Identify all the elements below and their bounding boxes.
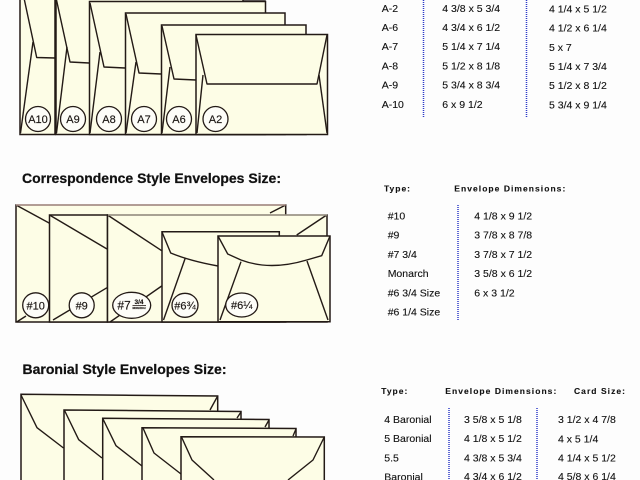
- envelope 5: [181, 437, 324, 480]
- row A-10: 5 3/4 x 9 1/4: [549, 100, 607, 112]
- row Monarch: 3 5/8 x 6 1/2: [474, 268, 532, 280]
- badge A6: A6: [172, 114, 186, 126]
- badge A10: A10: [28, 114, 48, 126]
- row #7 3/4: #7 3/4: [388, 249, 417, 261]
- envelope A6: [162, 25, 306, 134]
- envelope #10: [16, 205, 286, 322]
- envelope #9: [50, 215, 108, 322]
- heading: baronial: Baronial Style Envelopes Size:: [22, 361, 227, 377]
- faint top edges: [16, 205, 327, 215]
- row #9: 3 7/8 x 8 7/8: [474, 230, 532, 242]
- row A-8: 5 1/4 x 7 3/4: [549, 61, 607, 73]
- row #9: #9: [388, 230, 400, 242]
- table: announcement sizes: [382, 0, 607, 118]
- badge A6: [166, 106, 192, 132]
- row 4 Baronial: 4 Baronial: [384, 414, 432, 426]
- row #7 3/4: [388, 249, 532, 261]
- envelope #7 3/4: [108, 215, 327, 322]
- heading: correspondence: Correspondence Style Envelopes Size:: [22, 170, 281, 186]
- table: correspondence sizes: [384, 184, 565, 321]
- envelope #6 1/4: [218, 236, 330, 322]
- table header: Card Size:: [574, 386, 625, 396]
- row #6 1/4 Size: #6 1/4 Size: [388, 306, 440, 318]
- row A-7: 5 1/4 x 7 1/4: [442, 41, 500, 53]
- row A-7: [382, 41, 572, 54]
- badge #10: [23, 293, 49, 318]
- badge A2: A2: [209, 114, 222, 126]
- envelope 2: [64, 410, 241, 480]
- row 5.5: 4 1/4 x 5 1/2: [558, 452, 616, 464]
- badge #7 3/4: #7: [117, 298, 131, 312]
- row Monarch: Monarch: [388, 268, 429, 280]
- row A-10: 6 x 9 1/2: [442, 99, 483, 111]
- row 5.5: 5.5: [384, 452, 399, 464]
- row 5 Baronial: 5 Baronial: [384, 433, 432, 445]
- table header: [381, 386, 625, 396]
- badge #6 1/4: [226, 293, 258, 317]
- row A-2: A-2: [382, 3, 398, 15]
- row A-9: 5 3/4 x 8 3/4: [442, 80, 500, 92]
- row 5 Baronial: 4 1/8 x 5 1/2: [464, 433, 522, 445]
- row #7 3/4: 3 7/8 x 7 1/2: [474, 249, 532, 261]
- badge #6 1/4: #6¼: [231, 300, 253, 312]
- envelope 3: [103, 418, 269, 480]
- envelope A9: [56, 0, 265, 134]
- illustration: announcement style envelopes: [20, 0, 328, 134]
- row #10: 4 1/8 x 9 1/2: [474, 210, 532, 222]
- row A-2: 4 1/4 x 5 1/2: [549, 4, 607, 16]
- table header: [384, 184, 565, 194]
- row #6 3/4 Size: #6 3/4 Size: [388, 287, 440, 299]
- illustration: baronial style envelopes: [21, 394, 324, 480]
- row 5.5: [384, 452, 616, 464]
- row 5 Baronial: 4 x 5 1/4: [558, 434, 598, 446]
- row A-8: A-8: [382, 60, 398, 72]
- row A-6: [382, 22, 607, 34]
- row 4 Baronial: 3 5/8 x 5 1/8: [464, 414, 522, 426]
- table header: Type:: [381, 386, 407, 396]
- row 4 Baronial: 3 1/2 x 4 7/8: [558, 414, 616, 426]
- envelope A8: [90, 2, 266, 134]
- envelope A2: [196, 34, 328, 134]
- row A-6: 4 1/2 x 6 1/4: [549, 22, 607, 34]
- badge #7 3/4: [113, 292, 151, 318]
- envelope A10: [20, 0, 55, 134]
- envelope 1: [21, 394, 218, 480]
- badge A7: A7: [137, 114, 151, 126]
- row A-9: [382, 80, 607, 92]
- badge A9: A9: [66, 114, 80, 126]
- badge #7 3/4: 3/4: [134, 299, 144, 306]
- row #10: #10: [388, 210, 405, 222]
- row #6 3/4 Size: 6 x 3 1/2: [474, 287, 515, 299]
- row #9: [388, 230, 532, 242]
- badge A2: [203, 106, 228, 132]
- row A-6: A-6: [382, 22, 398, 34]
- badge A9: [60, 106, 86, 132]
- badge A10: [26, 106, 50, 132]
- table: baronial sizes: [381, 386, 625, 480]
- table header: Envelope Dimensions:: [454, 184, 565, 194]
- badge #10: #10: [27, 300, 45, 312]
- row A-9: A-9: [382, 80, 398, 92]
- table header: Envelope Dimensions:: [445, 386, 556, 396]
- badge #7 3/4: MONARCH: [132, 307, 146, 310]
- row 5.5: 4 3/8 x 5 3/4: [464, 452, 522, 464]
- row A-9: 5 1/2 x 8 1/2: [549, 80, 607, 92]
- badge A7: [132, 106, 156, 132]
- envelope 4: [142, 428, 296, 480]
- row A-8: [382, 60, 607, 73]
- row A-7: A-7: [382, 41, 398, 53]
- row Monarch: [388, 268, 532, 280]
- badge A8: A8: [102, 114, 116, 126]
- row A-2: [382, 3, 607, 16]
- row Baronial: [384, 471, 616, 480]
- row A-6: 4 3/4 x 6 1/2: [442, 22, 500, 34]
- row A-10: A-10: [382, 99, 404, 111]
- envelope A7: [126, 13, 285, 134]
- table header: Type:: [384, 184, 410, 194]
- illustration: correspondence style envelopes: [16, 205, 330, 322]
- row A-8: 5 1/2 x 8 1/8: [442, 60, 500, 72]
- row #6 3/4 Size: [388, 287, 515, 299]
- badge #6 3/4: #6¾: [174, 300, 197, 312]
- badge #6 3/4: [172, 293, 198, 317]
- badge #9: [69, 293, 94, 318]
- row 4 Baronial: [384, 414, 616, 426]
- badge A8: [96, 106, 122, 132]
- row #10: [388, 210, 532, 222]
- envelope #6 3/4: [162, 232, 279, 322]
- row A-2: 4 3/8 x 5 3/4: [442, 3, 500, 15]
- row A-10: [382, 99, 607, 112]
- row 5 Baronial: [384, 433, 598, 446]
- badge #9: #9: [76, 300, 88, 312]
- row A-7: 5 x 7: [549, 42, 572, 54]
